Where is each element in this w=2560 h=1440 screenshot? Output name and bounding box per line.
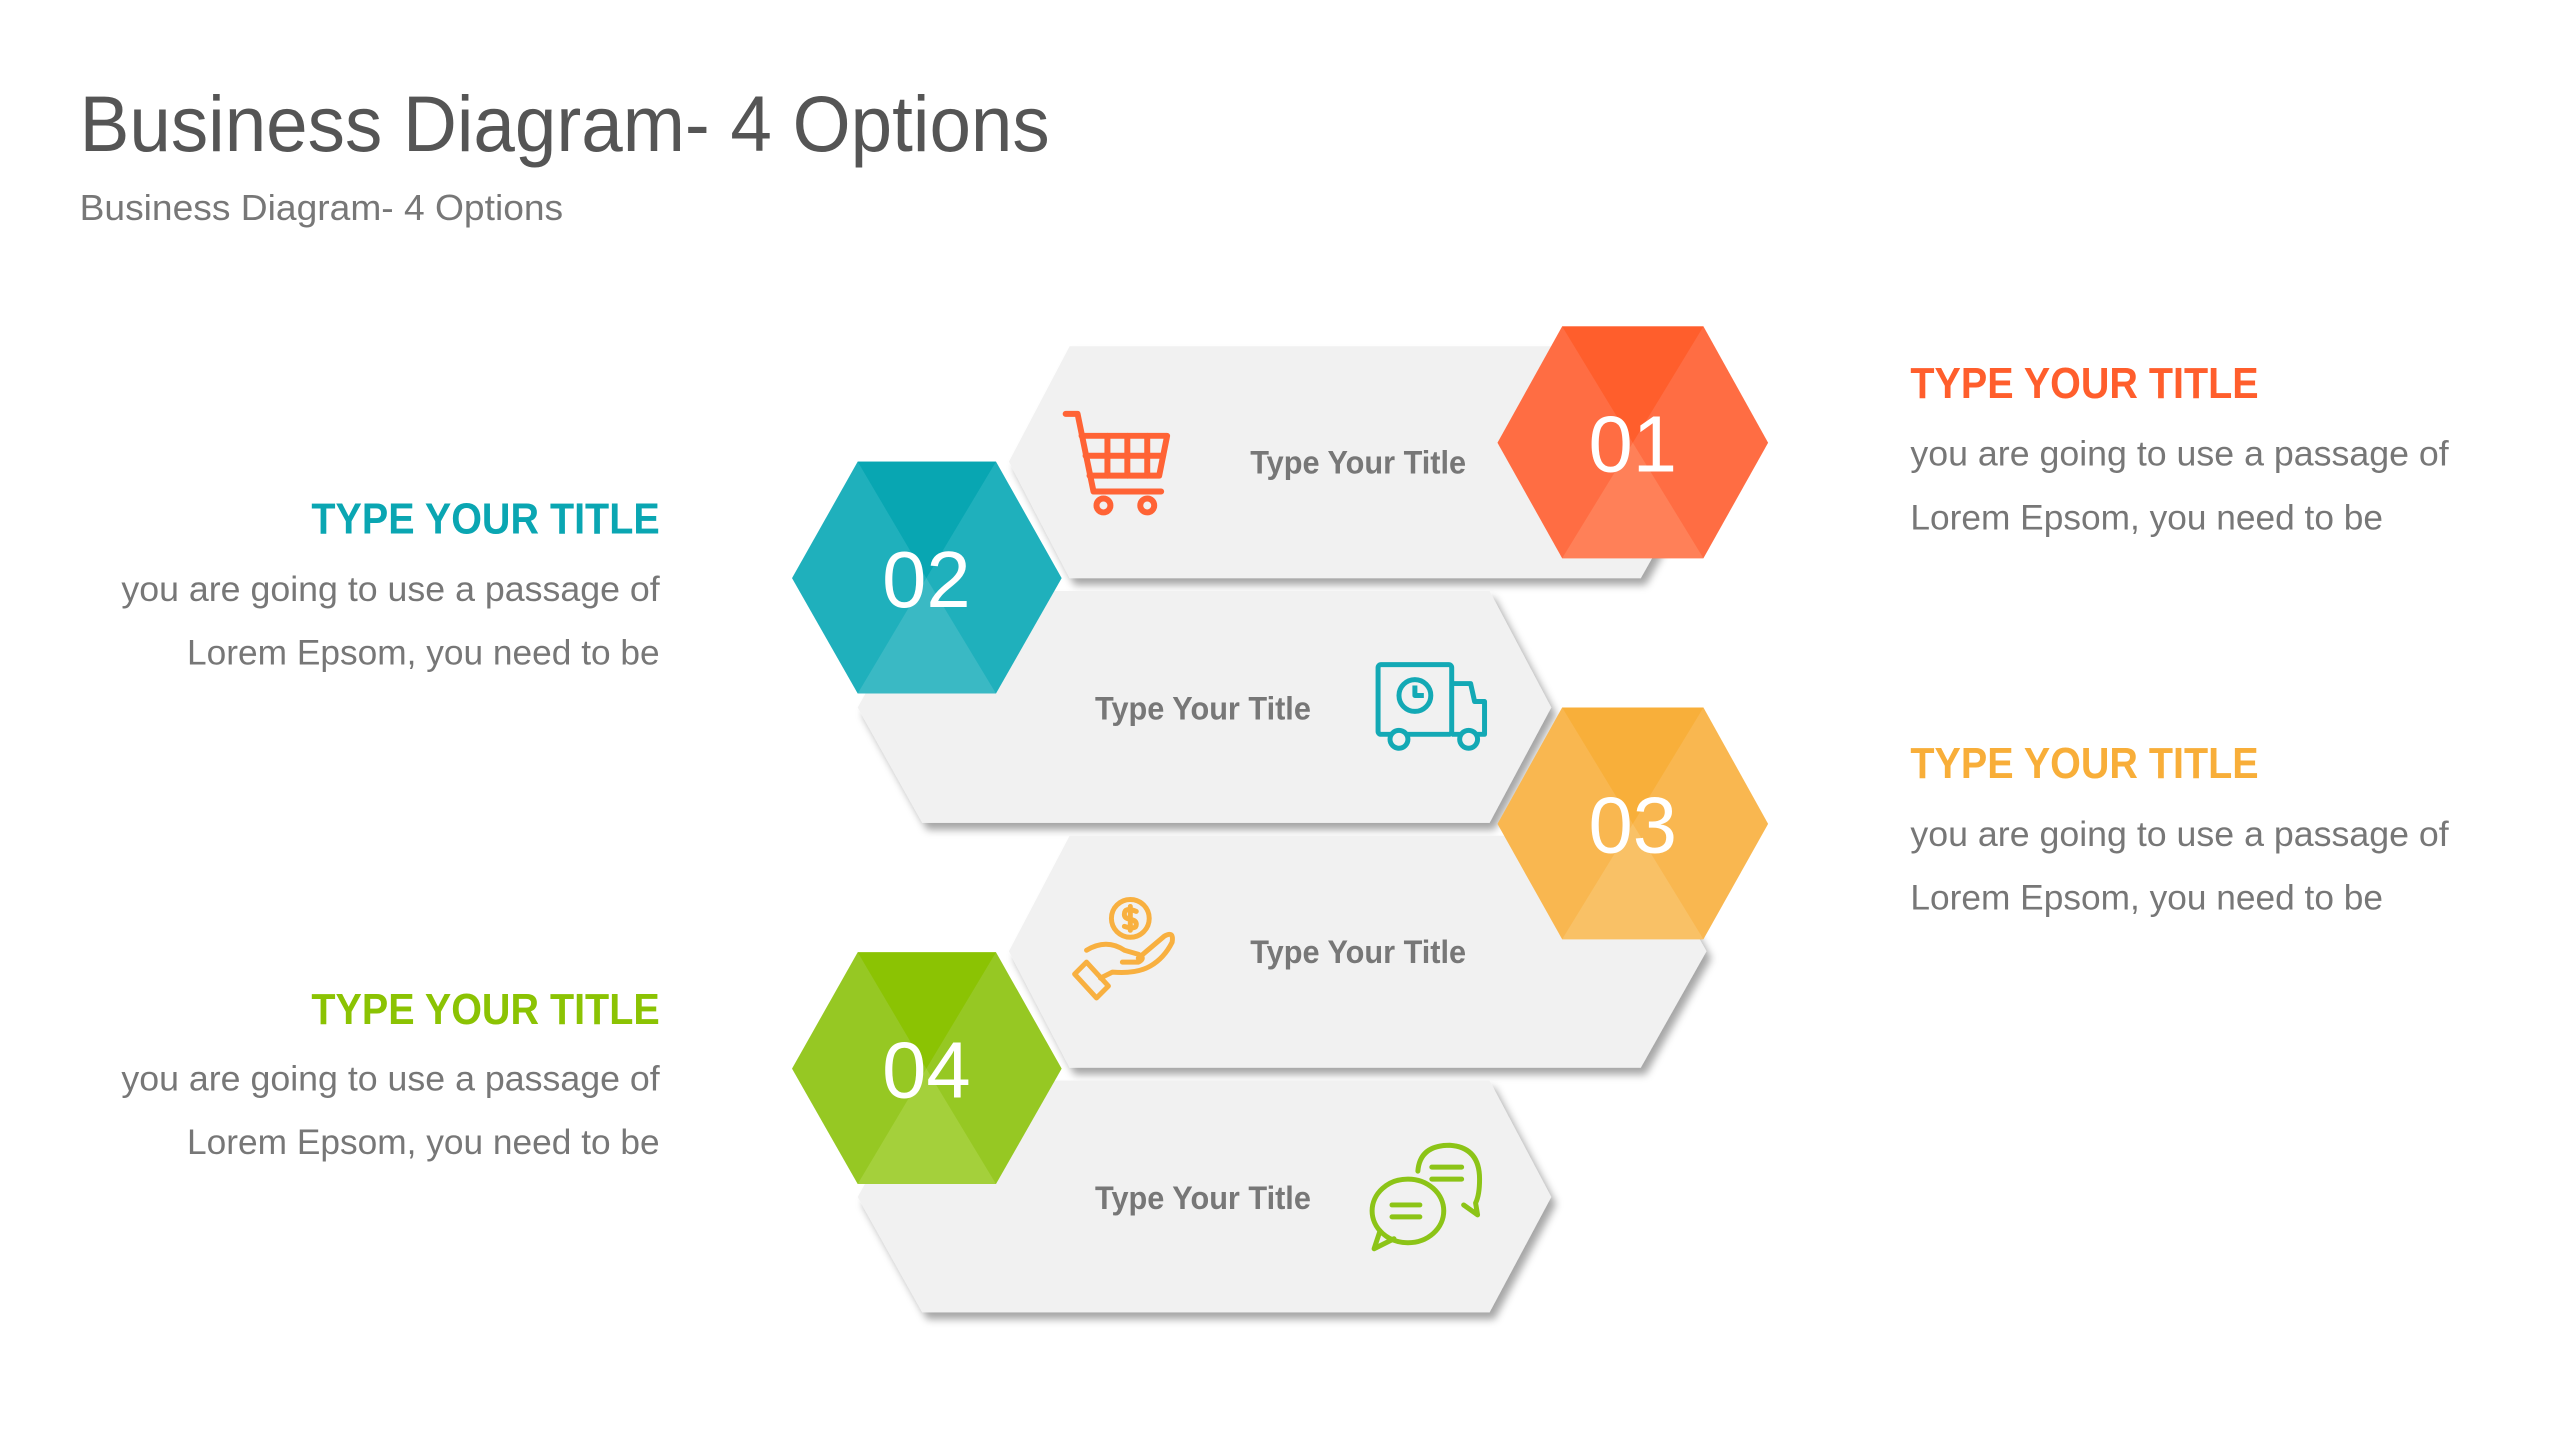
icon: truck [1378, 665, 1485, 748]
hexagon 04 [792, 952, 1062, 1184]
panel 3 label: Type Your Title [1250, 933, 1466, 970]
text block 01: TYPE YOUR TITLE [1910, 359, 2259, 408]
hexagon 02 [792, 462, 1062, 694]
panel 1 [1009, 346, 1706, 578]
title: Business Diagram- 4 Options [80, 80, 1050, 168]
hexagon 03: 03 [1589, 781, 1677, 870]
hexagon 03 [1497, 707, 1768, 939]
hexagon 01: 01 [1589, 400, 1677, 489]
text block 01: Lorem Epsom, you need to be [1910, 498, 2383, 537]
panel 2 label: Type Your Title [1095, 689, 1311, 726]
text block 04: you are going to use a passage of [121, 1060, 660, 1099]
text block 04 [121, 985, 660, 1162]
panel 1 label: Type Your Title [1250, 444, 1466, 481]
text block 01 [1910, 359, 2449, 537]
text block 02 [121, 494, 660, 673]
icon: cart [1066, 414, 1167, 512]
text block 04: Lorem Epsom, you need to be [187, 1123, 660, 1162]
text block 03 [1910, 739, 2449, 917]
text block 01: you are going to use a passage of [1910, 435, 2449, 474]
subtitle: Business Diagram- 4 Options [80, 188, 563, 228]
icon: chat bubbles [1372, 1145, 1480, 1249]
text block 03: Lorem Epsom, you need to be [1910, 878, 2383, 917]
panel 2 [858, 591, 1551, 823]
text block 03: TYPE YOUR TITLE [1910, 739, 2259, 788]
hexagon 02: 02 [882, 535, 971, 624]
text block 02: TYPE YOUR TITLE [311, 494, 660, 543]
hexagon 01 [1497, 326, 1768, 558]
text block 04: TYPE YOUR TITLE [311, 985, 660, 1034]
panel 4 [858, 1081, 1551, 1312]
text block 03: you are going to use a passage of [1910, 815, 2449, 854]
text block 02: you are going to use a passage of [121, 570, 660, 609]
text block 02: Lorem Epsom, you need to be [187, 634, 660, 673]
icon: hand with coin [1075, 899, 1172, 998]
hexagon 04: 04 [882, 1025, 971, 1114]
panel 3 [1009, 836, 1706, 1068]
panel 4 label: Type Your Title [1095, 1179, 1311, 1216]
